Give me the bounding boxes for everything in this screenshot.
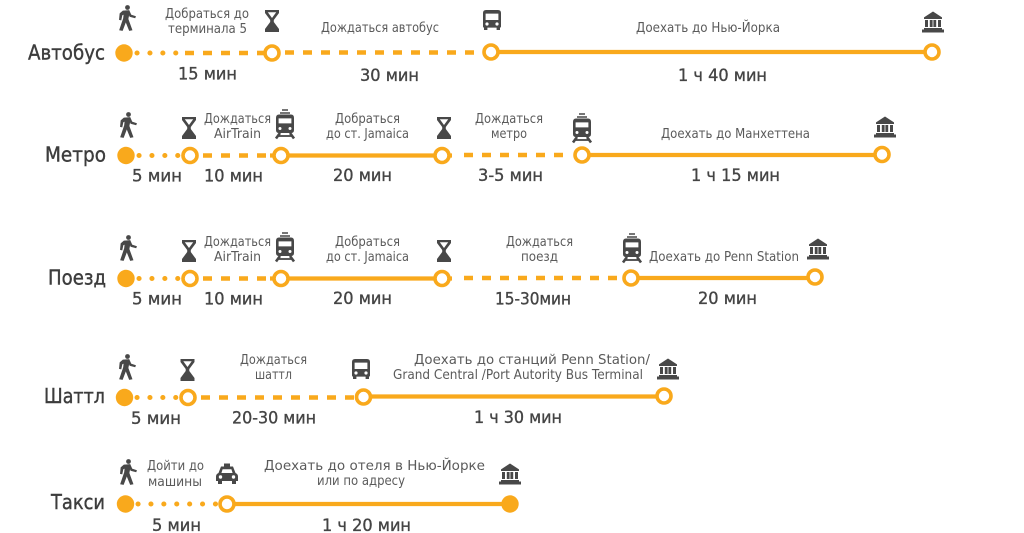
heading: Метро: Метро [45, 142, 106, 166]
text: wait for train [506, 234, 573, 265]
icon: hourglass [265, 10, 279, 32]
text: wait for shuttle [240, 352, 307, 383]
duration: 20 min: 20 мин [333, 289, 392, 309]
route line: Шаттл [116, 389, 671, 406]
icon: museum [499, 464, 521, 484]
text: ride to New York: Доехать до Нью-Йорка [636, 18, 780, 36]
icon: museum [874, 116, 896, 138]
icon: museum [807, 238, 829, 260]
text: ride to Jamaica [326, 234, 409, 265]
text: wait for subway: Дождаться [475, 111, 543, 127]
text: walk to terminal 5: терминала 5 [168, 21, 247, 37]
icon: bus [352, 359, 370, 379]
text: ride to stations: Доехать до станций Penn Station/ [414, 352, 650, 368]
icon: train [623, 234, 641, 262]
heading: Автобус: Автобус [28, 40, 105, 64]
duration: 30 min: 30 мин [360, 66, 419, 86]
duration: 10 min: 10 мин [204, 290, 263, 310]
duration: 5 min: 5 мин [131, 409, 181, 429]
duration: 1 h 15 min: 1 ч 15 мин [691, 166, 780, 186]
icon: hourglass [437, 117, 451, 139]
heading: Такси: Такси [50, 490, 105, 514]
icon: walker [119, 5, 136, 30]
duration: 10 min: 10 мин [204, 166, 263, 186]
route line: Поезд [117, 270, 822, 287]
route: Автобус [28, 5, 944, 86]
route: Такси [50, 456, 521, 533]
text: ride to hotel [264, 456, 485, 489]
route: Шаттл [44, 352, 679, 429]
duration: 1 h 30 min: 1 ч 30 мин [474, 408, 562, 428]
text: wait for shuttle: Дождаться [240, 352, 307, 368]
text: walk to car: машины [148, 474, 202, 490]
text: wait for AirTrain: Дождаться [204, 111, 271, 127]
text: wait for AirTrain: Дождаться [204, 234, 271, 250]
icon: museum [657, 358, 679, 380]
text: wait for train: поезд [521, 249, 558, 265]
text: walk to car [147, 458, 204, 490]
text: wait for AirTrain: AirTrain [214, 126, 261, 142]
text: wait for AirTrain [204, 111, 271, 142]
text: walk to car: Дойти до [147, 458, 204, 474]
text: wait for train: Дождаться [506, 234, 573, 250]
duration: 20 min: 20 мин [698, 289, 757, 309]
icon: walker [120, 459, 136, 484]
text: wait for AirTrain: AirTrain [214, 249, 261, 265]
text: ride to Jamaica: Добраться [335, 234, 400, 250]
route line: Автобус [115, 44, 939, 62]
text: ride to Jamaica: до ст. Jamaica [326, 126, 409, 142]
text: ride to hotel: Доехать до отеля в Нью-Йорке [264, 456, 485, 474]
icon: hourglass [182, 117, 196, 139]
text: wait for subway [475, 111, 543, 142]
route: Метро [45, 110, 896, 186]
heading: Поезд: Поезд [48, 266, 106, 290]
icon: museum [922, 12, 944, 32]
text: wait for bus: Дождаться автобус [321, 20, 439, 36]
text: ride to Jamaica: Добраться [335, 111, 400, 127]
icon: bus [483, 10, 501, 30]
text: ride to hotel: или по адресу [317, 473, 405, 489]
route: Поезд [48, 233, 829, 310]
icon: hourglass [182, 240, 196, 262]
text: wait for subway: метро [491, 126, 527, 142]
text: ride to Manhattan: Доехать до Манхеттена [661, 126, 810, 142]
text: ride to stations: Grand Central /Port Autority Bus Terminal [393, 367, 643, 383]
route line: Такси [117, 495, 519, 513]
duration: 15 min: 15 мин [178, 64, 237, 84]
duration: 20-30 min: 20-30 мин [232, 408, 316, 428]
text: ride to Jamaica: до ст. Jamaica [326, 249, 409, 265]
icon: hourglass [437, 240, 451, 262]
icon: train [573, 114, 591, 142]
text: ride to Jamaica [326, 111, 409, 142]
icon: train [276, 233, 294, 262]
icon: train [276, 110, 294, 138]
heading: Шаттл: Шаттл [44, 384, 105, 408]
duration: 1 h 40 min: 1 ч 40 мин [678, 66, 767, 86]
duration: 20 min: 20 мин [333, 166, 392, 186]
duration: 3-5 min: 3-5 мин [478, 166, 543, 186]
text: ride to Penn Station: Доехать до Penn Station [649, 249, 799, 265]
duration: 5 min: 5 мин [132, 166, 182, 186]
text: ride to stations [393, 352, 650, 383]
route line: Метро [117, 147, 889, 164]
icon: walker [119, 354, 136, 380]
text: walk to terminal 5: Добраться до [165, 6, 249, 22]
icon: taxi [216, 464, 238, 484]
text: wait for AirTrain [204, 234, 271, 265]
icon: walker [120, 235, 136, 260]
icon: walker [120, 112, 136, 138]
text: walk to terminal 5 [165, 6, 249, 37]
duration: 15-30 min: 15-30мин [495, 290, 571, 310]
text: wait for shuttle: шаттл [255, 367, 292, 383]
duration: 5 min: 5 мин [132, 290, 182, 310]
icon: hourglass [180, 359, 194, 381]
